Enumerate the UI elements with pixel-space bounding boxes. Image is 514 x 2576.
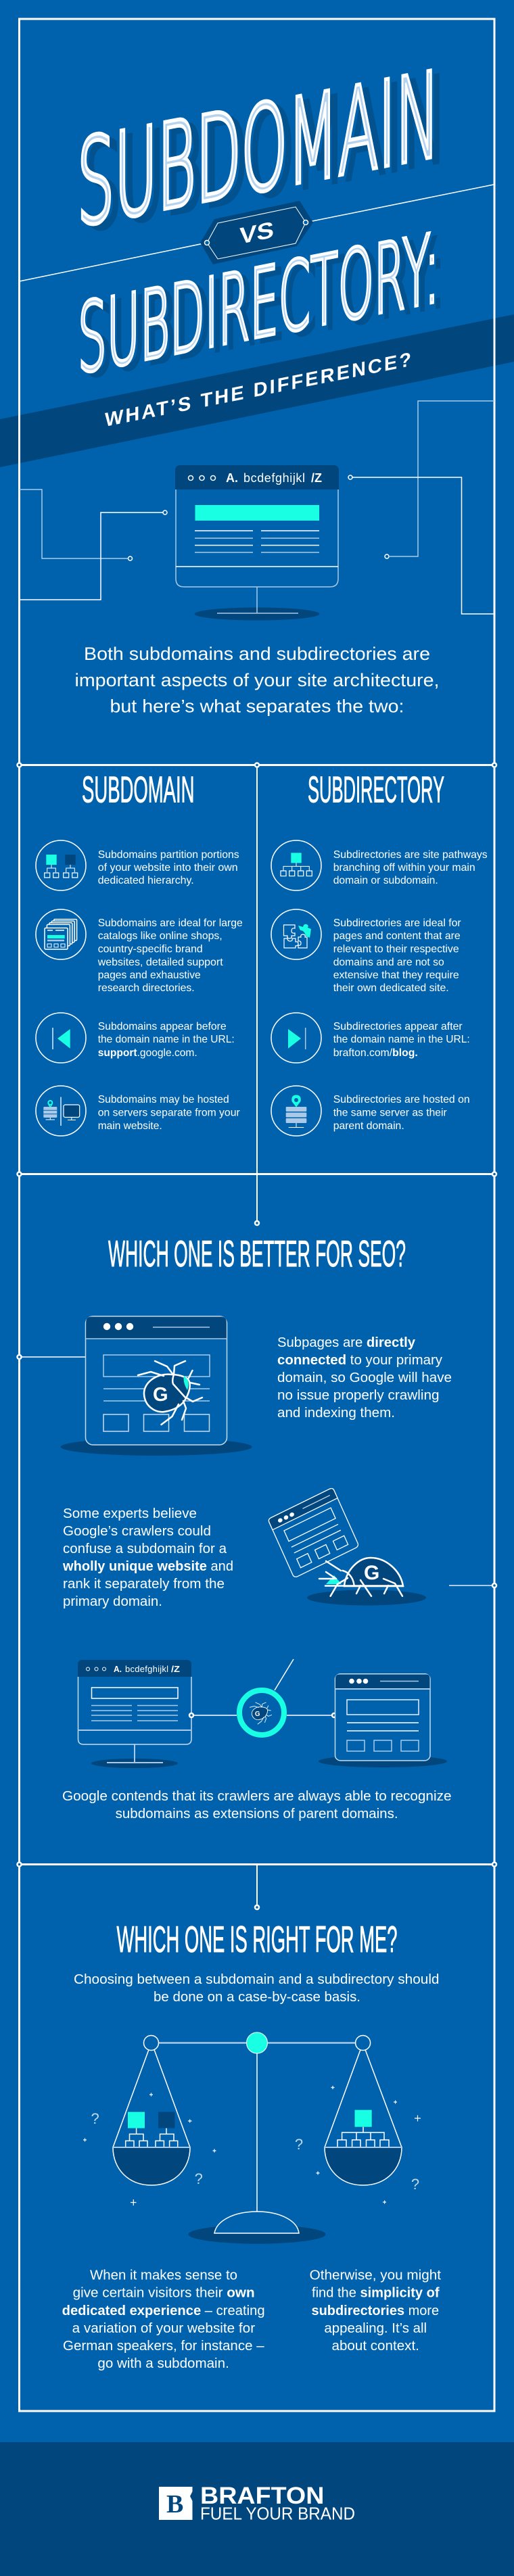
left pan — [113, 2035, 190, 2185]
icon: server and monitor — [36, 1086, 86, 1136]
text: hierarchy: dedicated hierarchy. — [98, 875, 194, 886]
icon: browser — [319, 1674, 447, 1767]
text: pathways: domain or subdomain. — [333, 875, 438, 886]
icon: monitor with address bar — [175, 465, 339, 621]
text: hierarchy — [98, 849, 239, 886]
title word: subdomain — [77, 47, 447, 258]
intro text — [74, 644, 440, 717]
text: directly connected: Subpages are directly — [277, 1335, 416, 1350]
text: own dedicated experience — [62, 2268, 265, 2371]
address bar text: bcdefghijkl — [243, 471, 305, 485]
illustration: crawler confusing a tilted browser — [268, 1487, 496, 1605]
title word: subdirectory — [78, 214, 446, 400]
address bar text: bcdefghijkl — [125, 1664, 168, 1674]
text: own dedicated experience: give certain visitors their own — [73, 2285, 255, 2301]
text: directly connected: and indexing them. — [277, 1405, 395, 1421]
icon: two hierarchies — [36, 840, 86, 890]
section divider — [18, 1862, 496, 1909]
sparkles — [83, 2086, 421, 2205]
text: wholly unique website: rank it separately from the — [63, 1576, 225, 1592]
text: simplicity of subdirectories: find the simplicity of — [312, 2285, 440, 2301]
text: wholly unique website: confuse a subdomain for a — [63, 1541, 227, 1556]
icon: puzzle pieces — [271, 909, 321, 959]
icon: side view crawler — [319, 1558, 403, 1596]
icon: magnifier with crawler — [239, 1690, 284, 1735]
right pan — [325, 2035, 402, 2185]
text: relevant pages: domains and are not so — [333, 957, 444, 968]
address bar text: /Z — [311, 471, 322, 485]
icon: arrow right — [271, 1013, 321, 1063]
text: pathways: branching off within your main — [333, 862, 475, 874]
text: own dedicated experience: go with a subdomain. — [97, 2356, 229, 2371]
text: hierarchy: Subdomains partition portions — [98, 849, 239, 861]
icon: arrow left — [36, 1013, 86, 1063]
text: google contends: Google contends that its crawlers are always able to recognize — [62, 1788, 452, 1804]
text: catalogs: catalogs like online shops, — [98, 930, 223, 942]
text: directly connected — [277, 1335, 452, 1421]
icon: crawler bug: G — [153, 1384, 168, 1406]
text: wholly unique website: wholly unique website and — [62, 1558, 233, 1574]
text: case by case: be done on a case-by-case basis. — [154, 1989, 360, 2005]
text: separate servers: on servers separate from your — [98, 1107, 240, 1118]
text: directly connected: domain, so Google will have — [277, 1370, 452, 1385]
text: same server: the same server as their — [333, 1107, 447, 1118]
intro text: Both subdomains and subdirectories are — [84, 644, 430, 664]
subtitle band — [0, 314, 514, 467]
text: google contends: subdomains as extensions of parent domains. — [116, 1806, 398, 1821]
brand logo — [159, 2483, 355, 2524]
text: pathways — [333, 849, 488, 886]
comparison panel dividers — [18, 763, 496, 1176]
tagline: FUEL YOUR BRAND — [200, 2504, 355, 2524]
icon: tilted browser — [268, 1487, 359, 1578]
text: same server: parent domain. — [333, 1120, 404, 1132]
text: google contends — [62, 1788, 452, 1821]
address bar text: /Z — [171, 1664, 180, 1674]
text: separate servers — [98, 1094, 240, 1132]
question marks: ? — [91, 2110, 99, 2127]
question marks: ? — [195, 2170, 203, 2187]
wordmark: BRAFTON — [200, 2483, 324, 2509]
illustration: crawler on browser — [18, 1316, 252, 1456]
text: catalogs: pages and exhaustive — [98, 970, 201, 981]
subtitle: WHAT’S THE DIFFERENCE? — [105, 348, 411, 431]
text: same server: Subdirectories are hosted on — [333, 1094, 470, 1105]
intro text: important aspects of your site architecture, — [74, 670, 440, 690]
question marks: ? — [295, 2136, 303, 2153]
text: pathways: Subdirectories are site pathways — [333, 849, 488, 861]
icon: stacked windows — [36, 909, 86, 959]
icon: single hierarchy — [271, 840, 321, 890]
text: url after: brafton.com/blog. — [333, 1047, 418, 1059]
question marks — [91, 2110, 419, 2193]
text: wholly unique website: primary domain. — [63, 1594, 162, 1609]
text: catalogs: Subdomains are ideal for large — [98, 917, 243, 929]
text: catalogs: websites, detailed support — [97, 957, 223, 968]
title — [20, 47, 494, 431]
text: directly connected: no issue properly crawling — [277, 1387, 440, 1403]
text: url before: Subdomains appear before — [98, 1021, 227, 1032]
text: simplicity of subdirectories: subdirectories more — [311, 2303, 439, 2318]
address bar text: A. — [226, 471, 238, 485]
text: same server — [333, 1094, 470, 1132]
text: url after: the domain name in the URL: — [333, 1034, 470, 1045]
text: url after: Subdirectories appear after — [333, 1021, 463, 1032]
text: own dedicated experience: a variation of your website for — [72, 2320, 255, 2336]
text: simplicity of subdirectories: appealing. It’s all — [324, 2320, 427, 2336]
icon: crawler bug — [138, 1361, 202, 1425]
text: relevant pages: Subdirectories are ideal for — [333, 917, 461, 929]
text: url after — [333, 1021, 470, 1059]
text: case by case: Choosing between a subdomain and a subdirectory should — [74, 1972, 440, 1987]
text: wholly unique website: Some experts believe — [63, 1506, 197, 1521]
text: own dedicated experience: German speakers, for instance – — [63, 2338, 264, 2354]
versus badge: VS — [239, 217, 274, 249]
text: relevant pages: extensive that they require — [333, 970, 459, 981]
text: case by case — [74, 1972, 440, 2005]
illustration: crawlers recognise subdomains — [78, 1659, 447, 1768]
icon: logo mark — [159, 2487, 192, 2520]
text: SUBDOMAIN — [82, 768, 195, 810]
text: url before: support.google.com. — [98, 1047, 197, 1059]
address bar text: A. — [114, 1664, 122, 1674]
text: separate servers: Subdomains may be hosted — [98, 1094, 229, 1105]
text: simplicity of subdirectories: about context. — [331, 2338, 419, 2354]
question marks: ? — [411, 2176, 419, 2193]
icon: server with pin — [271, 1086, 321, 1136]
text: catalogs: country-specific brand — [98, 944, 203, 955]
text: catalogs — [97, 917, 243, 994]
text: simplicity of subdirectories — [310, 2268, 441, 2354]
text: directly connected: connected to your primary — [277, 1352, 443, 1368]
icon: magnifier with crawler: G — [255, 1711, 260, 1718]
text: relevant pages: pages and content that are — [333, 930, 461, 942]
text: url before — [98, 1021, 235, 1059]
panel: subdirectory — [271, 840, 488, 1136]
icon: logo mark: B — [166, 2490, 183, 2519]
intro text: but here’s what separates the two: — [110, 696, 404, 717]
text: catalogs: research directories. — [98, 982, 195, 994]
illustration: balance scale — [83, 2032, 421, 2244]
address bar text — [226, 471, 322, 485]
footer band — [0, 2442, 514, 2576]
connector to SEO section — [255, 1174, 259, 1225]
text: relevant pages: relevant to their respective — [333, 944, 459, 955]
text: simplicity of subdirectories: Otherwise, you might — [310, 2268, 441, 2283]
versus badge — [20, 185, 494, 281]
address bar text — [114, 1664, 180, 1674]
text: url before: the domain name in the URL: — [98, 1034, 235, 1045]
icon: side view crawler: G — [364, 1562, 379, 1584]
text: relevant pages: their own dedicated site. — [333, 982, 449, 994]
text: hierarchy: of your website into their own — [98, 862, 238, 874]
circuit lines — [20, 401, 494, 614]
text: wholly unique website: Google’s crawlers could — [63, 1523, 211, 1539]
text: wholly unique website — [62, 1506, 233, 1609]
panel: subdomain — [36, 840, 243, 1136]
text: own dedicated experience: dedicated experience – creating — [62, 2303, 265, 2318]
icon: monitor — [78, 1660, 191, 1768]
text: separate servers: main website. — [98, 1120, 162, 1132]
text: relevant pages — [333, 917, 461, 994]
text: own dedicated experience: When it makes sense to — [90, 2268, 237, 2283]
